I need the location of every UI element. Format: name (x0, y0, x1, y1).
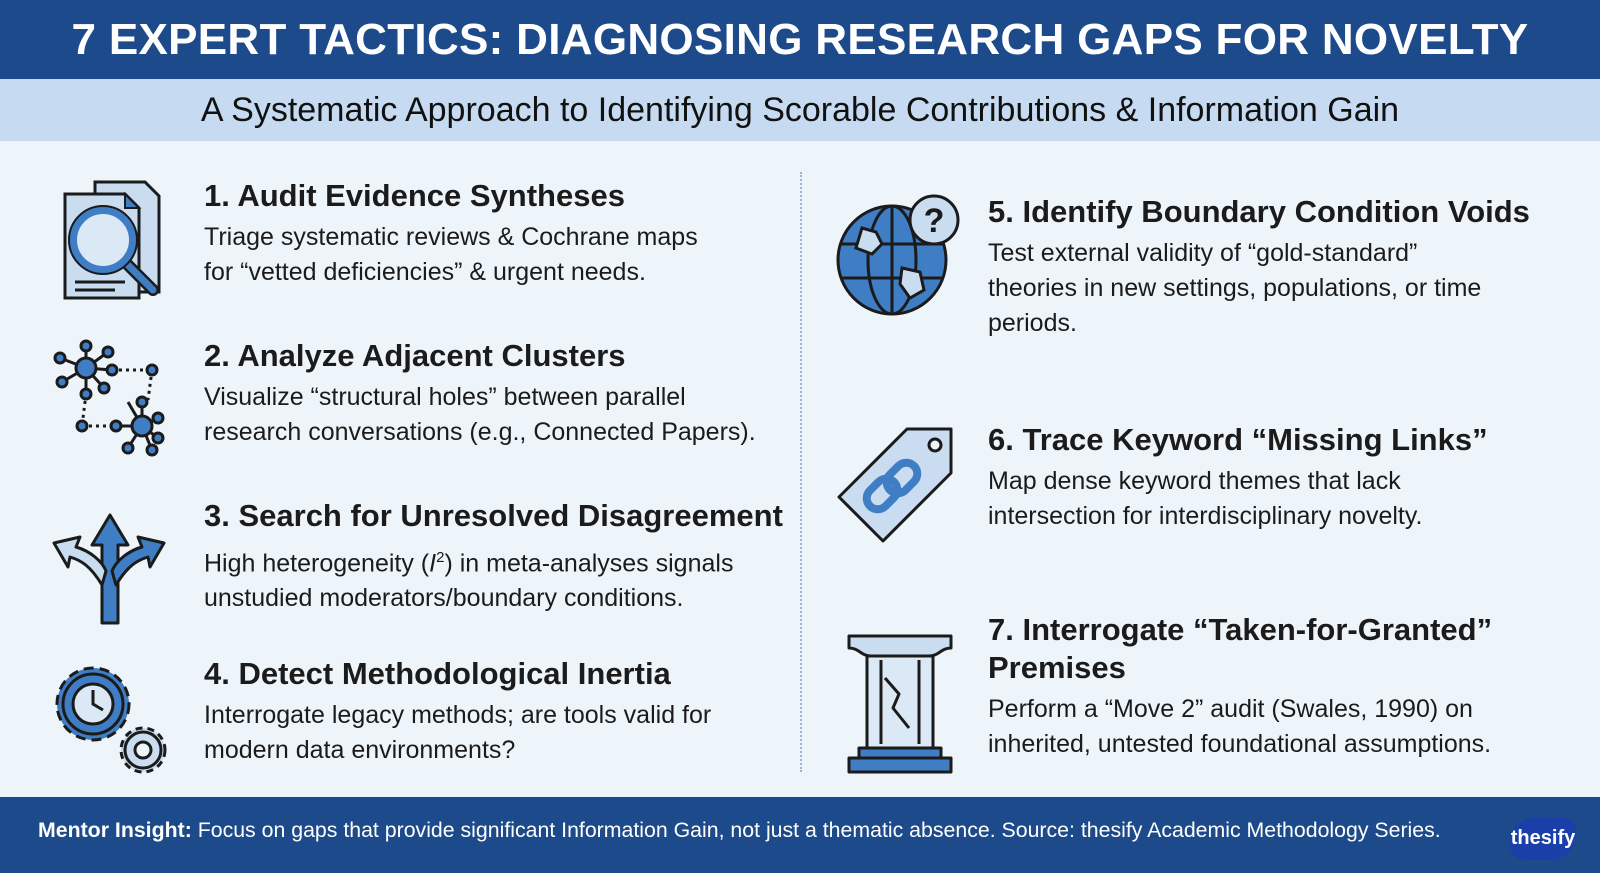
item 1 (204, 178, 698, 286)
item 4: 4. Detect Methodological Inertia (204, 656, 671, 691)
item 7: Perform a “Move 2” audit (Swales, 1990) on (988, 695, 1473, 723)
title bar (0, 0, 1600, 79)
item 2 (204, 338, 756, 446)
item 6: 6. Trace Keyword “Missing Links” (988, 422, 1488, 457)
item 4 (204, 656, 711, 764)
item 4: modern data environments? (204, 736, 515, 764)
item 5: theories in new settings, populations, or time (988, 274, 1481, 302)
item 5 (988, 194, 1530, 337)
icon: gears and clock (56, 666, 166, 774)
item 6: intersection for interdisciplinary novelty. (988, 502, 1422, 530)
icon: cracked pillar (848, 634, 952, 774)
logo: thesify: thesify (1511, 827, 1575, 849)
item 1: for “vetted deficiencies” & urgent needs. (204, 258, 646, 286)
icon: globe question: ? (924, 202, 944, 240)
item 2: 2. Analyze Adjacent Clusters (204, 338, 626, 373)
divider (800, 172, 802, 772)
item 3: 3. Search for Unresolved Disagreement (204, 498, 783, 533)
item 1: Triage systematic reviews & Cochrane maps (204, 223, 698, 251)
footer: Mentor Insight: Focus on gaps that provide significant Information Gain, not just a thematic absence. Source: thesify Academic Methodology Series. (38, 818, 1441, 842)
subtitle band: A Systematic Approach to Identifying Scorable Contributions & Information Gain (201, 91, 1399, 129)
icon: network clusters (54, 340, 164, 456)
icon: diverging arrows (52, 513, 166, 624)
item 7: Premises (988, 650, 1126, 685)
item 6 (988, 422, 1488, 530)
item 3: unstudied moderators/boundary conditions. (204, 584, 683, 612)
icon: globe question (836, 194, 960, 316)
item 3 (204, 498, 783, 612)
item 7: inherited, untested foundational assumptions. (988, 730, 1491, 758)
item 7: 7. Interrogate “Taken-for-Granted” (988, 612, 1492, 647)
item 4: Interrogate legacy methods; are tools valid for (204, 701, 711, 729)
footer (0, 797, 1600, 873)
item 5: periods. (988, 309, 1077, 337)
item 2: research conversations (e.g., Connected Papers). (204, 418, 756, 446)
item 5: 5. Identify Boundary Condition Voids (988, 194, 1530, 229)
item 1: 1. Audit Evidence Syntheses (204, 178, 625, 213)
item 7 (988, 612, 1492, 758)
icon: document magnifier (64, 180, 160, 300)
logo: thesify (1510, 818, 1576, 860)
item 2: Visualize “structural holes” between parallel (204, 383, 686, 411)
item 6: Map dense keyword themes that lack (988, 467, 1401, 495)
item 5: Test external validity of “gold-standard” (988, 239, 1417, 267)
title bar: 7 EXPERT TACTICS: DIAGNOSING RESEARCH GAPS FOR NOVELTY (72, 15, 1528, 64)
icon: tag with link (837, 428, 952, 543)
item 3: High heterogeneity (I2) in meta-analyses signals (204, 549, 733, 577)
subtitle band (0, 79, 1600, 141)
